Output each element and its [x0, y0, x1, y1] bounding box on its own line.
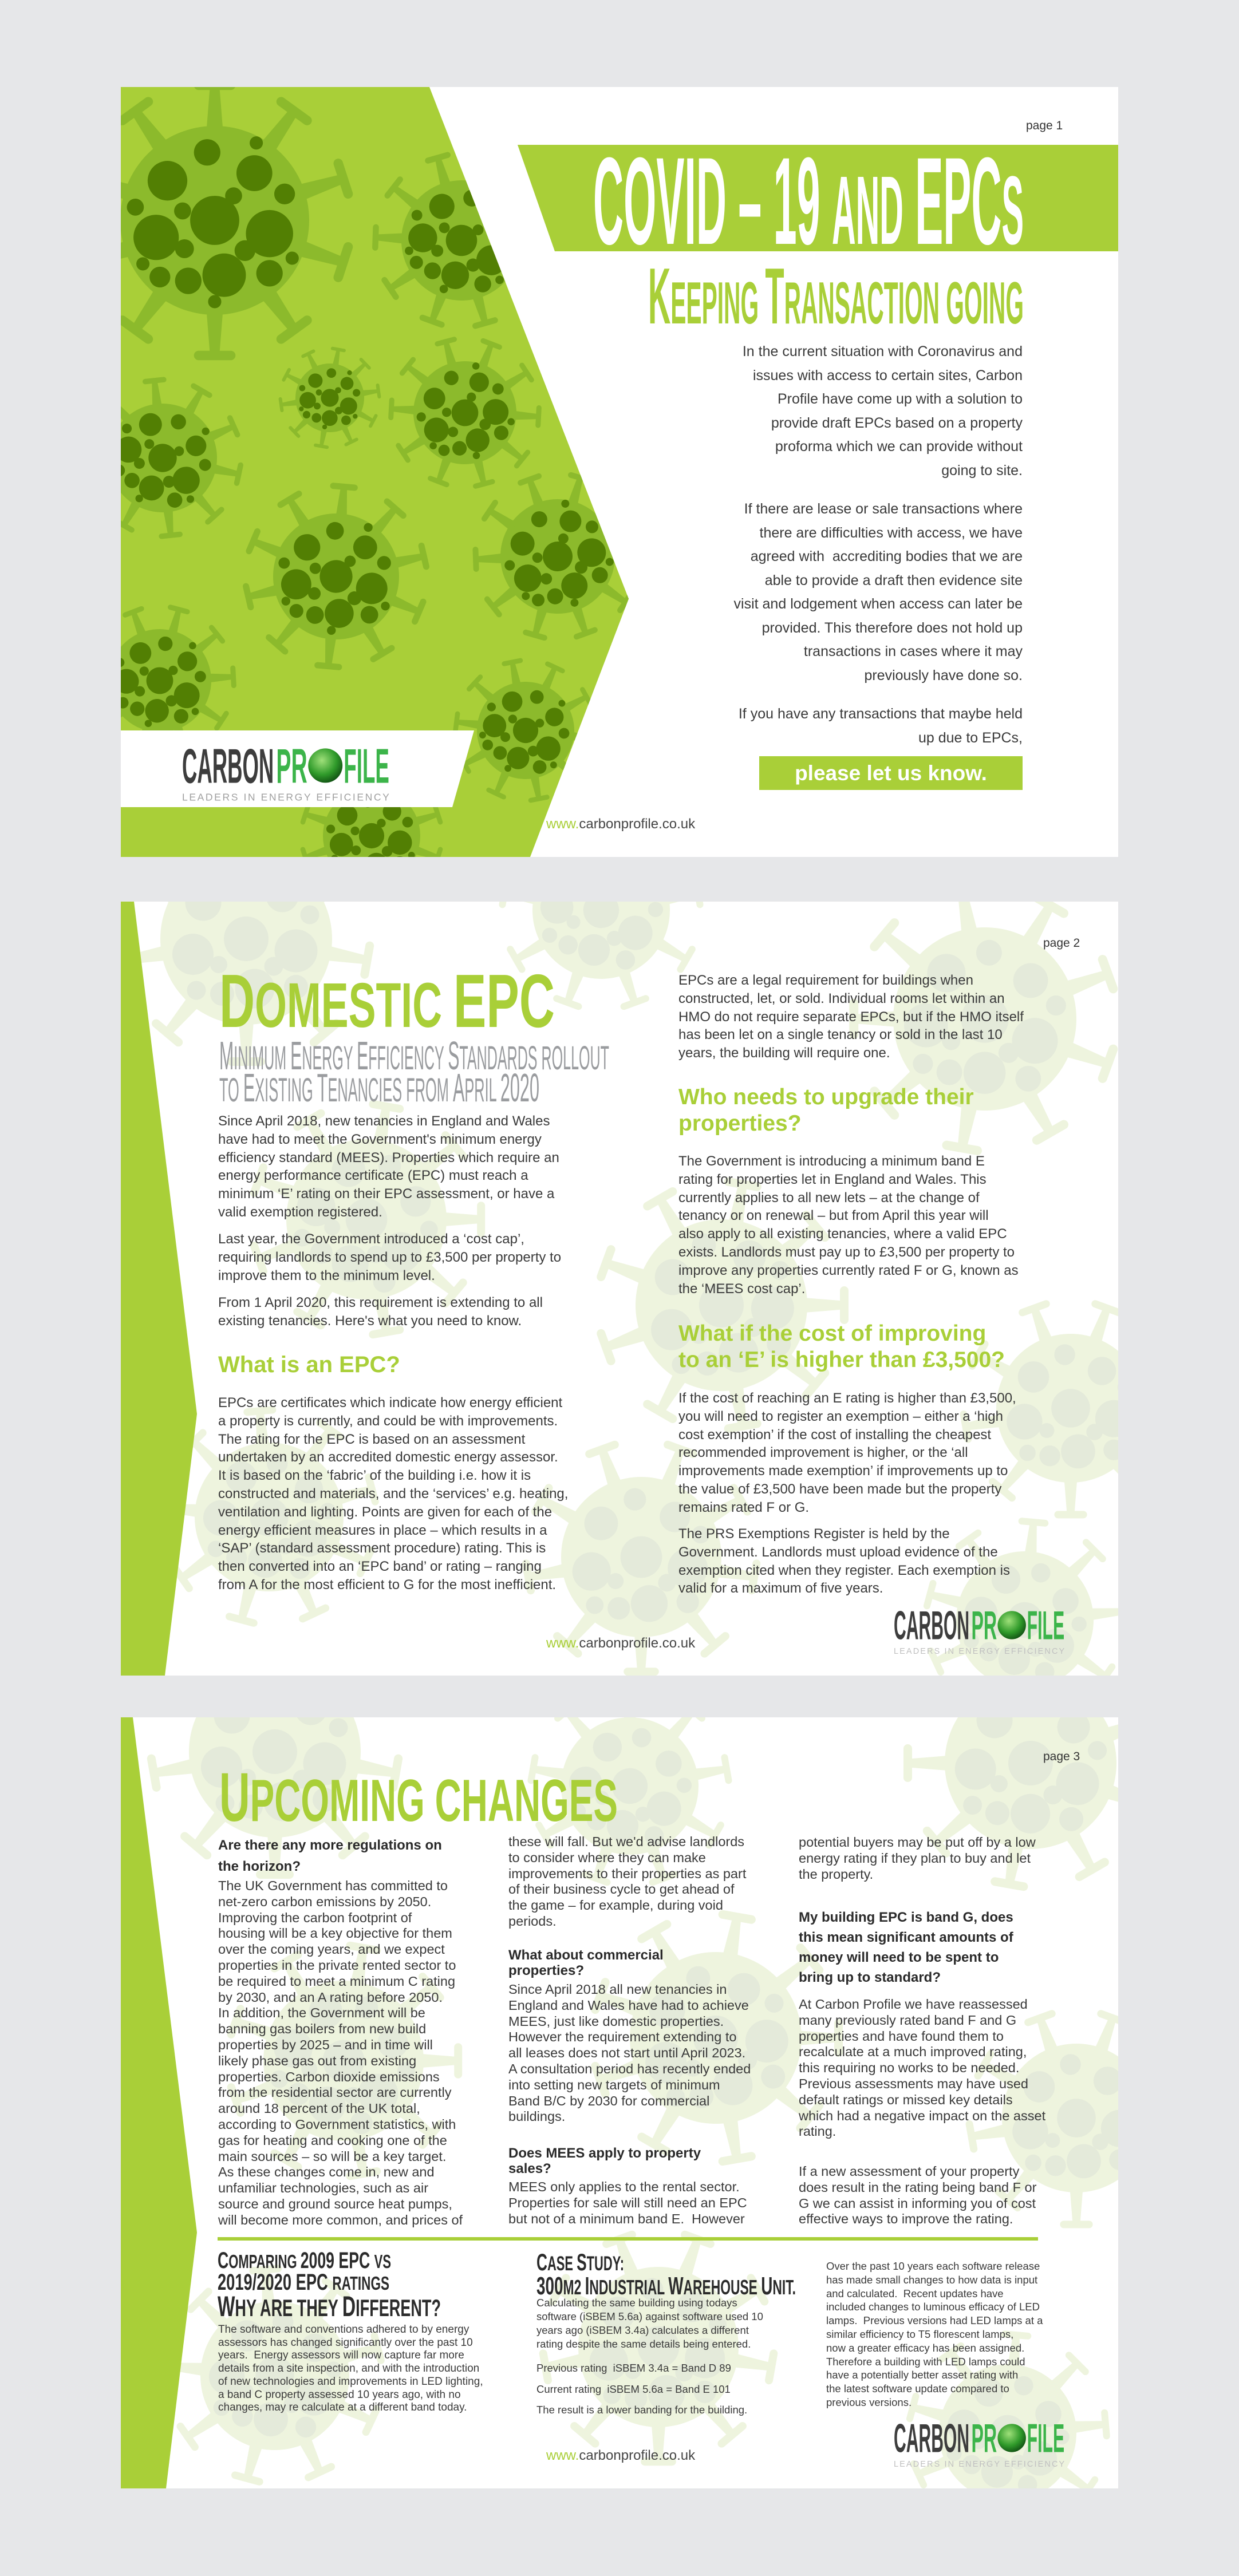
- text block: software releases: Therefore a building with LED lamps could: [826, 2356, 1025, 2368]
- website page 3: www.carbonprofile.co.uk: [546, 2448, 695, 2463]
- text block: case study body: Calculating the same building using todays: [536, 2297, 737, 2309]
- text block: intro paragraph: provide draft EPCs based on a property: [771, 414, 1023, 430]
- text block: continued: the game – for example, during void: [508, 1898, 723, 1913]
- text block: access paragraph: previously have done so.: [864, 667, 1023, 683]
- text block: software releases: and calculated. Recent updates have: [826, 2287, 1004, 2300]
- text block: commercial body: Band B/C by 2030 for commercial: [508, 2093, 709, 2108]
- text block: EPC definition: from A for the most efficient to G for the most inefficient.: [218, 1577, 556, 1593]
- text block: call to action: up due to EPCs,: [918, 729, 1023, 745]
- text block: regulations body: properties in the private rented sector to: [218, 1958, 456, 1973]
- text block: continued: of their business cycle to get ahead of: [508, 1882, 735, 1897]
- logo: page 3: PR: [971, 2416, 997, 2461]
- text block: software conventions: years. Energy assessors will now capture far more: [218, 2349, 464, 2361]
- text block: sales body: Properties for sale will still need an EPC: [508, 2195, 747, 2210]
- heading: commercial properties: properties?: [508, 1963, 584, 1978]
- text block: continued: these will fall. But we'd advise landlords: [508, 1834, 744, 1849]
- text block: from April 2020: [218, 1295, 543, 1329]
- text block: regulations body: banning gas boilers from new build: [218, 2021, 426, 2036]
- text block: software conventions: a band C property assessed 10 years ago, with no: [218, 2389, 461, 2401]
- text block: regulations body: source and ground source heat pumps,: [218, 2196, 452, 2211]
- text block: regulations body: properties by 2025 – and in time will: [218, 2037, 433, 2052]
- heading: who needs to upgrade: properties?: [678, 1111, 802, 1136]
- heading: more regulations: the horizon?: [218, 1859, 301, 1874]
- background shapes and titles: [121, 87, 1118, 2488]
- text block: assist: G we can assist in informing you of cost: [799, 2196, 1036, 2211]
- text block: regulations body: unfamiliar technologies, such as air: [218, 2180, 428, 2195]
- text block: PRS register: Government. Landlords must upload evidence of the: [678, 1544, 998, 1560]
- text block: regulations body: [218, 1878, 463, 2227]
- divider rule: [218, 2237, 1038, 2241]
- heading: commercial properties: [508, 1947, 664, 1978]
- text block: from April 2020: existing tenancies. Here's what you need to know.: [218, 1313, 522, 1329]
- text block: ratings: [536, 2362, 747, 2416]
- text block: regulations body: over the coming years, and we expect: [218, 1942, 445, 1957]
- text block: commercial body: all leases does not start until April 2023.: [508, 2045, 745, 2060]
- heading: MEES property sales: sales?: [508, 2161, 551, 2176]
- text block: software releases: Over the past 10 years each software release: [826, 2260, 1040, 2272]
- text block: EPC definition: ventilation and lighting. Points are given for each of the: [218, 1504, 552, 1520]
- text block: access paragraph: there are difficulties with access, we have: [759, 524, 1023, 540]
- text block: software releases: have a potentially better asset rating with: [826, 2369, 1018, 2381]
- text block: commercial body: into setting new targets of minimum: [508, 2077, 720, 2092]
- text block: call to action: If you have any transactions that maybe held: [739, 706, 1023, 722]
- text block: EPC definition: then converted into an ‘EPC band’ or rating – ranging: [218, 1559, 542, 1574]
- text block: regulations body: around 18 percent of the UK total,: [218, 2101, 420, 2116]
- heading: comparing 2009 EPC: WHY ARE THEY DIFFERENT?: [218, 2290, 441, 2322]
- text block: sales body: [508, 2179, 747, 2226]
- text block: legal requirement: has been let on a single tenancy or sold in the last 10: [678, 1027, 1003, 1042]
- text block: regulations body: from the residential sector are currently: [218, 2085, 451, 2100]
- logo band: [121, 730, 474, 807]
- text block: EPC definition: undertaken by an accredited domestic energy assessor.: [218, 1449, 558, 1465]
- heading: more regulations: Are there any more regulations on: [218, 1838, 442, 1853]
- text block: regulations body: properties. Carbon dioxide emissions: [218, 2069, 440, 2084]
- text block: regulations body: net-zero carbon emissions by 2050.: [218, 1894, 431, 1909]
- text block: reassessed: recalculate at a much improved rating,: [799, 2044, 1027, 2059]
- logo: page 2: LEADERS IN ENERGY EFFICIENCY: [894, 1647, 1065, 1656]
- text block: EPC definition: EPCs are certificates which indicate how energy efficient: [218, 1395, 562, 1411]
- text block: MEES intro: efficiency standard (MEES). Properties which require an: [218, 1150, 559, 1165]
- text block: exemption: you will need to register an exemption – either a ‘high: [678, 1409, 1003, 1424]
- text block: exemption: [678, 1390, 1016, 1515]
- text block: MEES intro: have had to meet the Government's minimum energy: [218, 1132, 542, 1147]
- title band: [518, 145, 1118, 251]
- heading: more regulations: [218, 1838, 442, 1874]
- text block: cost cap: requiring landlords to spend up to £3,500 per property to: [218, 1250, 561, 1265]
- text block: EPC definition: [218, 1395, 568, 1593]
- page label 3: page 3: [1043, 1750, 1080, 1763]
- heading: band G: money will need to be spent to: [799, 1950, 999, 1965]
- text block: ratings: The result is a lower banding for the building.: [536, 2404, 747, 2416]
- website page 1: www.carbonprofile.co.uk: [546, 816, 695, 832]
- logo: page 1: PR: [276, 739, 307, 793]
- panel: page 3: [121, 1717, 1118, 2488]
- text block: case study body: software (iSBEM 5.6a) against software used 10: [536, 2310, 763, 2322]
- text block: regulations body: will become more common, and prices of: [218, 2212, 463, 2227]
- button: please let us know: please let us know.: [795, 761, 987, 785]
- text block: regulations body: As these changes come in, new and: [218, 2164, 435, 2179]
- text block: PRS register: valid for a maximum of five years.: [678, 1581, 883, 1596]
- text block: access paragraph: agreed with accrediting bodies that we are: [751, 548, 1023, 564]
- text block: commercial body: England and Wales have had to achieve: [508, 1998, 749, 2013]
- text block: reassessed: At Carbon Profile we have reassessed: [799, 1997, 1028, 2012]
- text block: access paragraph: provided. This therefore does not hold up: [762, 619, 1023, 635]
- text block: regulations body: housing will be a key objective for them: [218, 1926, 452, 1941]
- text block: regulations body: main sources – so will be a key target.: [218, 2149, 446, 2164]
- text block: continued: to consider where they can make: [508, 1850, 706, 1865]
- heading: band G: bring up to standard?: [799, 1970, 941, 1985]
- logo: page 2: PR: [971, 1603, 997, 1648]
- heading: band G: this mean significant amounts of: [799, 1930, 1013, 1945]
- subtitle: MEES rollout: MINIMUM ENERGY EFFICIENCY STANDARDS ROLLOUT: [219, 1033, 609, 1078]
- text block: software releases: [826, 2260, 1043, 2408]
- green side strip: [121, 902, 197, 1676]
- green side strip: [121, 1717, 197, 2488]
- text block: PRS register: [678, 1526, 1010, 1596]
- text block: exemption: If the cost of reaching an E rating is higher than £3,500,: [678, 1390, 1016, 1406]
- text block: reassessed: [799, 1997, 1045, 2139]
- green chevron with viruses: [121, 87, 629, 857]
- text block: minimum band E: the ‘MEES cost cap’.: [678, 1281, 805, 1297]
- text block: intro paragraph: Profile have come up with a solution to: [778, 391, 1023, 407]
- text block: reassessed: many previously rated band F and G: [799, 2013, 1016, 2028]
- text block: ratings: Current rating iSBEM 5.6a = Band E 101: [536, 2383, 731, 2395]
- text block: legal requirement: constructed, let, or sold. Individual rooms let within an: [678, 991, 1005, 1006]
- text block: assist: [799, 2164, 1036, 2226]
- subtitle: MEES rollout: [219, 1033, 609, 1110]
- text block: minimum band E: tenancy or on renewal – but from April this year will: [678, 1208, 989, 1223]
- heading: comparing 2009 EPC: COMPARING 2009 EPC VS: [218, 2248, 391, 2273]
- text block: MEES intro: [218, 1113, 559, 1220]
- text block: regulations body: Improving the carbon footprint of: [218, 1910, 412, 1925]
- background shapes and titles: FILE: [344, 739, 389, 793]
- text block: legal requirement: EPCs are a legal requirement for buildings when: [678, 973, 973, 988]
- text block: software releases: now a greater efficacy has been assigned.: [826, 2342, 1024, 2354]
- text block: reassessed: this requiring no works to be needed.: [799, 2060, 1019, 2075]
- text block: intro paragraph: proforma which we can provide without: [775, 438, 1023, 455]
- text block: buyers: potential buyers may be put off by a low: [799, 1835, 1036, 1850]
- text block: regulations body: likely phase gas out from existing: [218, 2053, 416, 2068]
- text block: regulations body: be required to meet a minimum C rating: [218, 1974, 455, 1989]
- text block: continued: improvements to their properties as part: [508, 1866, 746, 1881]
- text block: cost cap: [218, 1231, 561, 1283]
- heading: case study: [536, 2249, 796, 2300]
- text block: assist: does result in the rating being band F or: [799, 2180, 1036, 2195]
- text block: minimum band E: exists. Landlords must pay up to £3,500 per property to: [678, 1244, 1015, 1260]
- text block: EPC definition: The rating for the EPC is based on an assessment: [218, 1432, 525, 1447]
- text block: commercial body: MEES, just like domestic properties.: [508, 2014, 724, 2029]
- text block: minimum band E: The Government is introducing a minimum band E: [678, 1153, 985, 1169]
- text block: access paragraph: visit and lodgement when access can later be: [734, 596, 1023, 612]
- text block: software releases: previous versions.: [826, 2396, 912, 2408]
- text block: commercial body: However the requirement extending to: [508, 2029, 736, 2044]
- background shapes and titles: FILE: [1027, 2416, 1064, 2461]
- panel: page 1: [121, 87, 1118, 857]
- heading: who needs to upgrade: [678, 1085, 974, 1136]
- title: Upcoming changes: UPCOMING CHANGES: [219, 1758, 618, 1836]
- text block: minimum band E: currently applies to all new lets – at the change of: [678, 1190, 980, 1206]
- text block: EPC definition: energy efficient measures in place – which results in a: [218, 1523, 547, 1538]
- heading: band G: [799, 1910, 1013, 1985]
- logo: page 3: CARBON: [894, 2416, 969, 2461]
- heading: commercial properties: What about commercial: [508, 1947, 664, 1963]
- text block: ratings: Previous rating iSBEM 3.4a = Band D 89: [536, 2362, 731, 2374]
- text block: legal requirement: years, the building will require one.: [678, 1045, 890, 1061]
- heading: comparing 2009 EPC: 2019/2020 EPC RATINGS: [218, 2270, 389, 2295]
- text block: commercial body: buildings.: [508, 2109, 565, 2124]
- text block: intro paragraph: issues with access to certain sites, Carbon: [753, 368, 1023, 384]
- heading: MEES property sales: Does MEES apply to property: [508, 2146, 701, 2161]
- text block: assist: If a new assessment of your property: [799, 2164, 1019, 2179]
- text block: EPC definition: a property is currently, and could be with improvements.: [218, 1413, 558, 1429]
- text block: exemption: cost exemption’ if the cost of installing the cheapest: [678, 1427, 991, 1443]
- subtitle: MEES rollout: TO EXISTING TENANCIES FROM APRIL 2020: [219, 1065, 539, 1110]
- text block: reassessed: default ratings or missed key details: [799, 2092, 1013, 2107]
- text block: reassessed: rating.: [799, 2124, 836, 2139]
- logo: page 3: LEADERS IN ENERGY EFFICIENCY: [894, 2460, 1065, 2469]
- logo: page 1: CARBON: [182, 739, 274, 793]
- text block: call to action: [739, 706, 1023, 745]
- text block: access paragraph: able to provide a draft then evidence site: [765, 572, 1023, 588]
- text block: exemption: improvements made exemption’ if improvements up to: [678, 1463, 1008, 1479]
- text block: commercial body: Since April 2018 all new tenancies in: [508, 1982, 727, 1997]
- text block: MEES intro: valid exemption registered.: [218, 1204, 382, 1220]
- text block: PRS register: The PRS Exemptions Register is held by the: [678, 1526, 950, 1542]
- text block: access paragraph: transactions in cases where it may: [804, 643, 1023, 659]
- text block: minimum band E: rating for properties let in England and Wales. This: [678, 1172, 987, 1187]
- text block: software releases: the latest software update compared to: [826, 2383, 1009, 2395]
- text block: software conventions: assessors has changed significantly over the past 10: [218, 2337, 473, 2349]
- text block: regulations body: gas for heating and cooking one of the: [218, 2133, 447, 2148]
- text block: MEES intro: energy performance certificate (EPC) must reach a: [218, 1168, 528, 1183]
- text block: software releases: has made small changes to how data is input: [826, 2274, 1037, 2286]
- text block: cost cap: Last year, the Government introduced a ‘cost cap’,: [218, 1231, 524, 1247]
- text block: exemption: the value of £3,500 have been made but the property: [678, 1481, 1001, 1497]
- text block: sales body: MEES only applies to the rental sector.: [508, 2179, 740, 2194]
- text block: commercial body: [508, 1982, 751, 2124]
- text block: minimum band E: [678, 1153, 1019, 1297]
- heading: band G: My building EPC is band G, does: [799, 1910, 1013, 1925]
- text block: exemption: remains rated F or G.: [678, 1500, 809, 1515]
- heading: what is an EPC: What is an EPC?: [218, 1352, 400, 1377]
- heading: cost higher than 3500: [678, 1321, 1005, 1372]
- text block: regulations body: The UK Government has committed to: [218, 1878, 448, 1893]
- text block: exemption: recommended improvement is higher, or the ‘all: [678, 1445, 968, 1460]
- text block: intro paragraph: going to site.: [941, 463, 1023, 479]
- page label 1: page 1: [1026, 119, 1063, 132]
- text block: legal requirement: HMO do not require separate EPCs, but if the HMO itself: [678, 1009, 1024, 1025]
- text block: MEES intro: minimum ‘E’ rating on their EPC assessment, or have a: [218, 1186, 554, 1202]
- text block: regulations body: according to Government statistics, with: [218, 2117, 456, 2132]
- heading: case study: 300M2 INDUSTRIAL WAREHOUSE UNIT.: [536, 2272, 796, 2300]
- heading: who needs to upgrade: Who needs to upgrade their: [678, 1085, 974, 1109]
- text block: minimum band E: improve any properties currently rated F or G, known as: [678, 1263, 1019, 1278]
- text block: MEES intro: Since April 2018, new tenancies in England and Wales: [218, 1113, 550, 1129]
- background shapes and titles: FILE: [1027, 1603, 1064, 1648]
- text block: case study body: years ago (iSBEM 3.4a) calculates a different: [536, 2324, 749, 2336]
- text block: continued: [508, 1834, 747, 1929]
- button: please let us know: [759, 756, 1023, 790]
- text block: EPC definition: constructed and materials, and the ‘services’ e.g. heating,: [218, 1486, 568, 1502]
- text block: from April 2020: From 1 April 2020, this requirement is extending to all: [218, 1295, 543, 1310]
- heading: MEES property sales: [508, 2146, 701, 2176]
- text block: EPC definition: It is based on the ‘fabric’ of the building i.e. how it is: [218, 1468, 531, 1483]
- text block: software conventions: The software and conventions adhered to by energy: [218, 2324, 469, 2336]
- website page 2: www.carbonprofile.co.uk: [546, 1635, 695, 1651]
- text block: software releases: similar efficiency to T5 florescent lamps,: [826, 2328, 1013, 2340]
- text block: software conventions: details from a site inspection, and with the introduction: [218, 2362, 479, 2374]
- text block: buyers: the property.: [799, 1867, 873, 1882]
- text block: software releases: lamps. Previous versions had LED lamps at a: [826, 2314, 1043, 2326]
- text block: intro paragraph: [743, 343, 1023, 479]
- text block: reassessed: Previous assessments may have used: [799, 2076, 1028, 2091]
- logo: page 1: LEADERS IN ENERGY EFFICIENCY: [182, 791, 389, 803]
- title: Domestic EPC: DOMESTIC EPC: [219, 959, 555, 1043]
- text block: cost cap: improve them to the minimum level.: [218, 1268, 435, 1283]
- heading: cost higher than 3500: What if the cost of improving: [678, 1321, 986, 1346]
- text block: legal requirement: [678, 973, 1024, 1061]
- text block: access paragraph: [734, 501, 1023, 683]
- text block: assist: effective ways to improve the rating.: [799, 2211, 1013, 2226]
- panel: page 2: [121, 902, 1118, 1676]
- heading: cost higher than 3500: to an ‘E’ is higher than £3,500?: [678, 1348, 1005, 1372]
- text block: regulations body: by 2030, and an A rating before 2050.: [218, 1990, 443, 2005]
- text block: commercial body: A consultation period has recently ended: [508, 2061, 751, 2076]
- logo: page 2: CARBON: [894, 1603, 969, 1648]
- text block: reassessed: properties and have found them to: [799, 2029, 1004, 2044]
- text block: sales body: but not of a minimum band E. However: [508, 2211, 745, 2226]
- text block: PRS register: exemption cited when they register. Each exemption is: [678, 1563, 1010, 1578]
- page label 2: page 2: [1043, 937, 1080, 950]
- text block: intro paragraph: In the current situation with Coronavirus and: [743, 343, 1023, 359]
- text block: case study body: [536, 2297, 763, 2350]
- text block: software releases: included changes to luminous efficacy of LED: [826, 2301, 1040, 2313]
- text block: software conventions: changes, may re calculate at a different band today.: [218, 2401, 467, 2413]
- text block: reassessed: which had a negative impact on the asset: [799, 2108, 1045, 2123]
- heading: case study: CASE STUDY:: [536, 2249, 624, 2275]
- text block: access paragraph: If there are lease or sale transactions where: [744, 501, 1023, 517]
- text block: minimum band E: also apply to all existing tenancies, where a valid EPC: [678, 1226, 1007, 1242]
- text block: case study body: rating despite the same details being entered.: [536, 2338, 751, 2350]
- heading: comparing 2009 EPC: [218, 2248, 441, 2322]
- text block: buyers: energy rating if they plan to buy and let: [799, 1851, 1031, 1866]
- text block: software conventions: of new technologies and improvements in LED lighting,: [218, 2376, 483, 2388]
- text block: software conventions: [218, 2324, 483, 2413]
- text block: continued: periods.: [508, 1914, 557, 1929]
- text block: regulations body: In addition, the Government will be: [218, 2005, 425, 2020]
- text block: EPC definition: ‘SAP’ (standard assessment procedure) rating. This is: [218, 1540, 546, 1556]
- text block: buyers: [799, 1835, 1036, 1882]
